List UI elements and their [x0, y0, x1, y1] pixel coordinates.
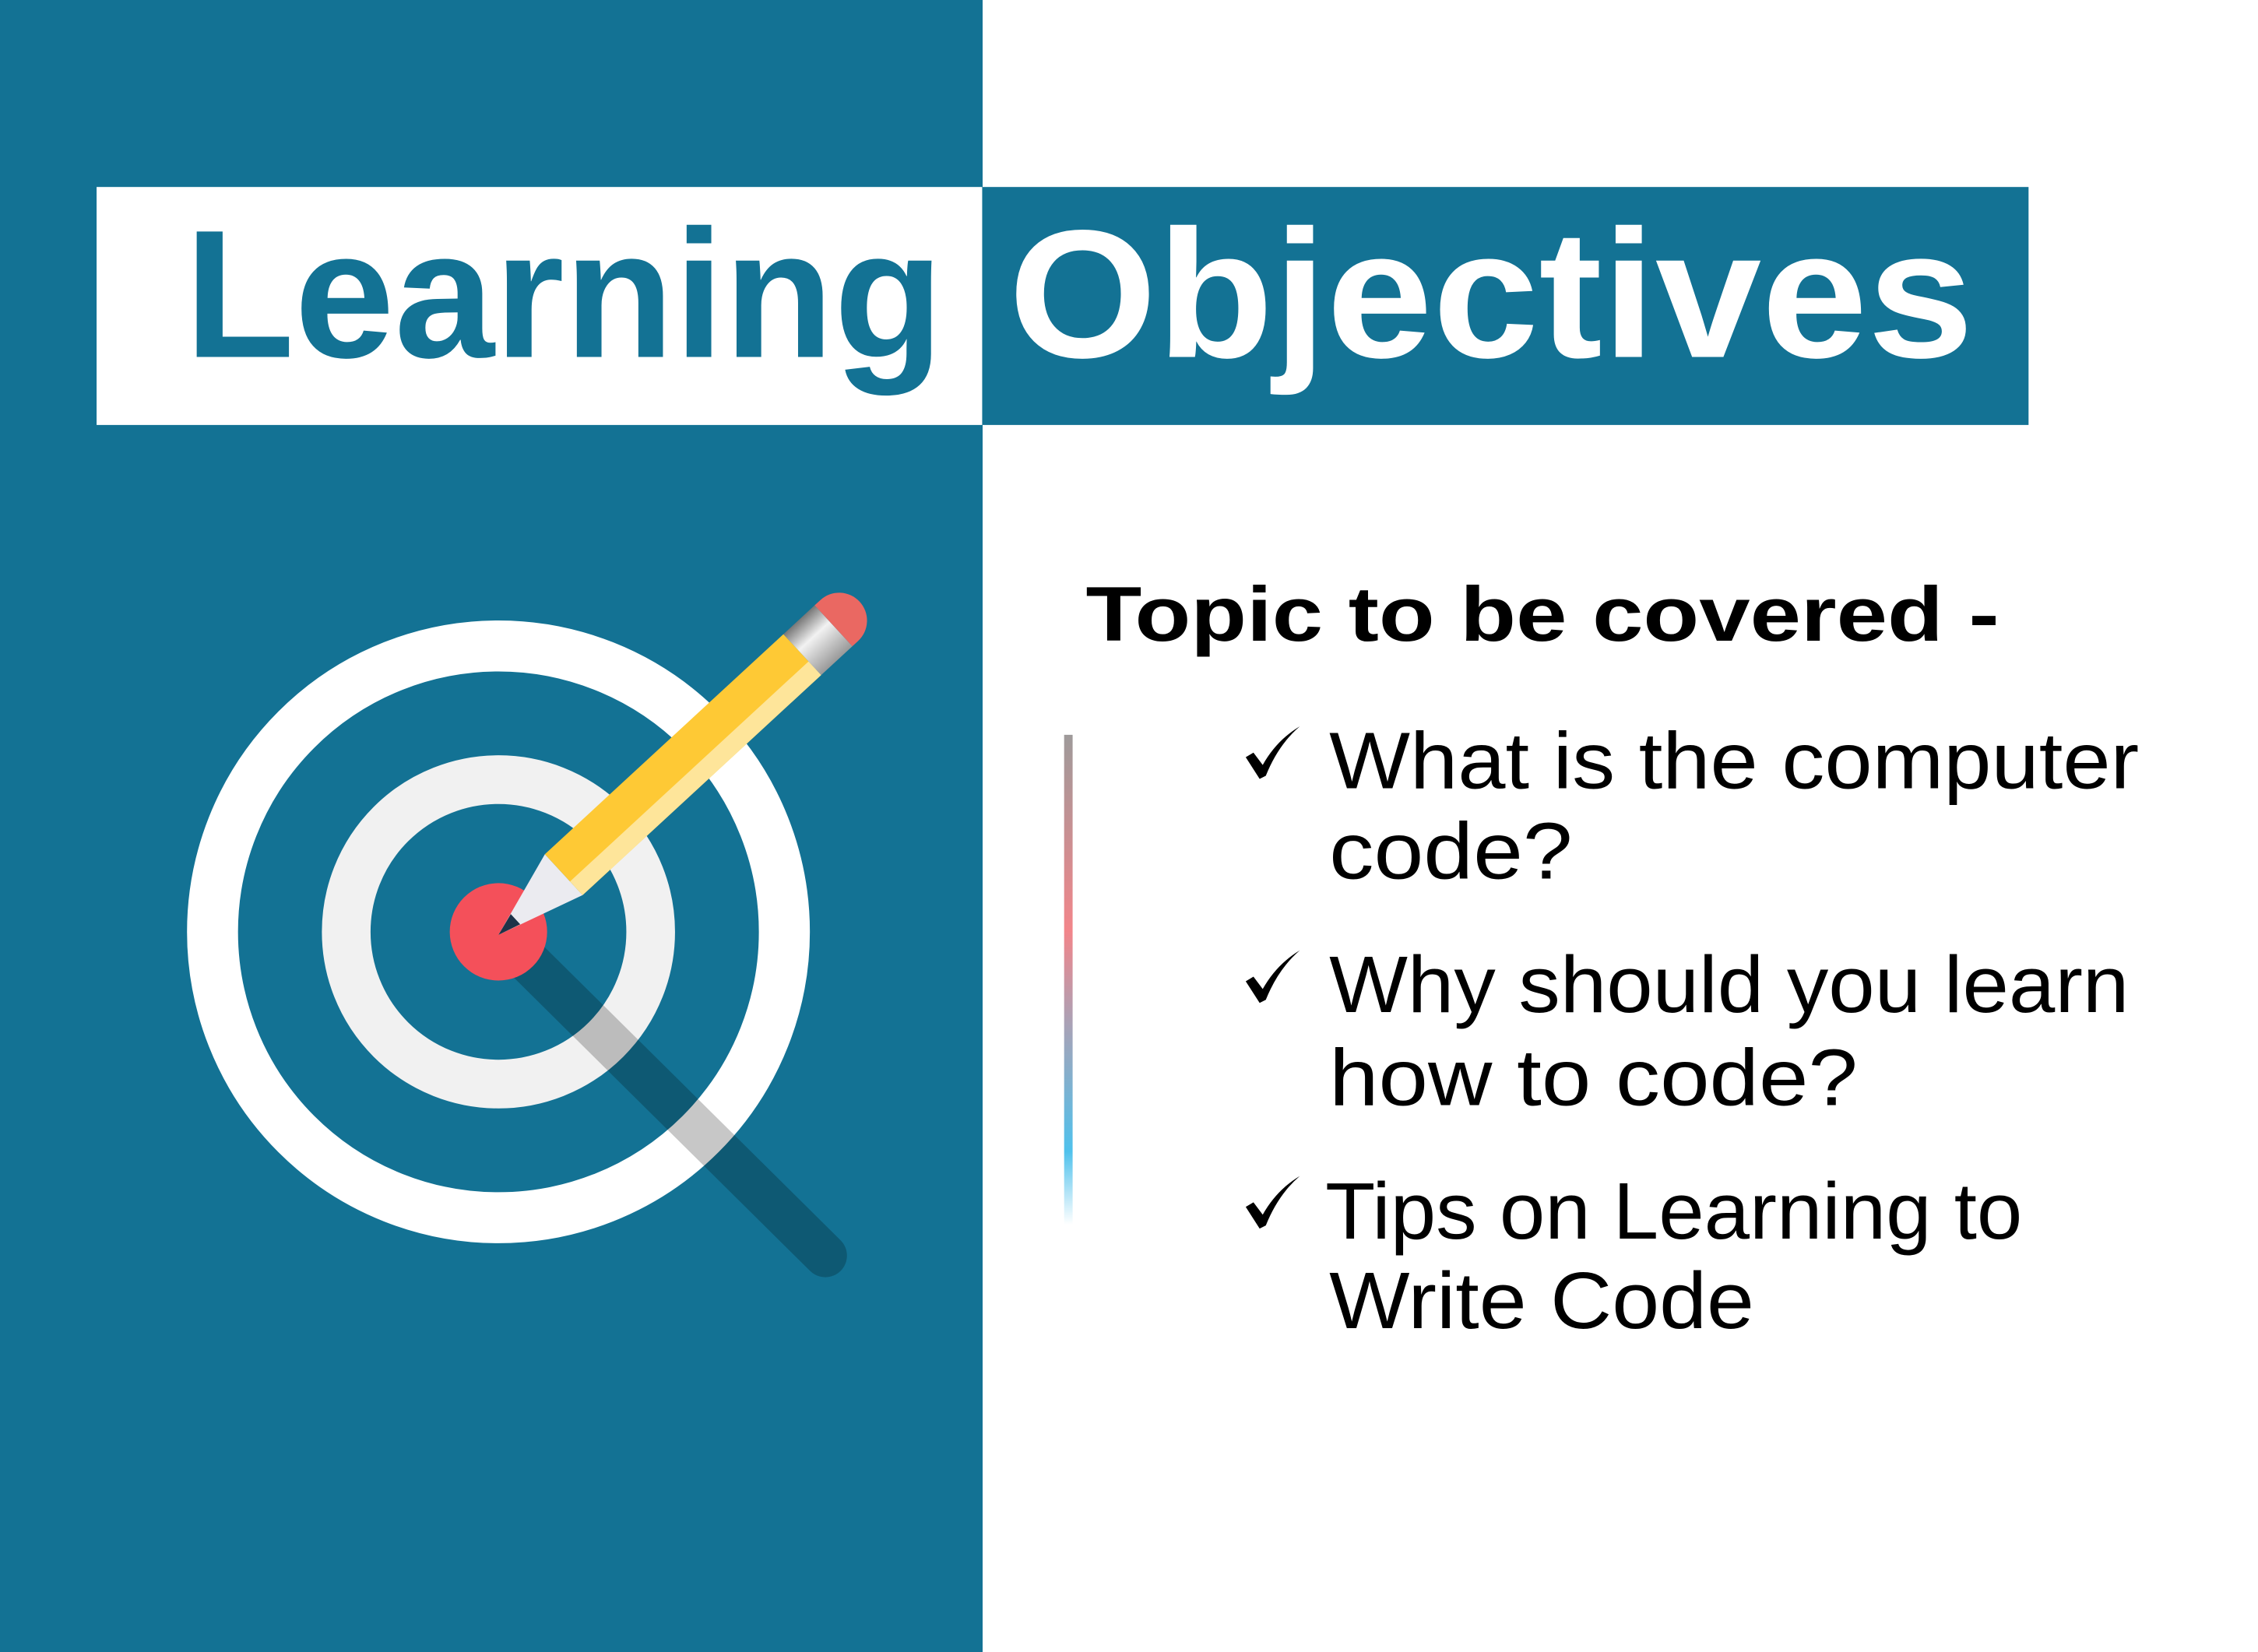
- icon: target with pencil: [213, 582, 878, 1256]
- left blue panel: [0, 0, 983, 1652]
- icon: check: [1246, 951, 1300, 1003]
- list: topics: [1246, 715, 2139, 1345]
- title band: [97, 187, 2028, 425]
- item 3: Tips on Learning to: [1325, 1166, 2022, 1256]
- gradient divider line: [1064, 735, 1073, 1225]
- item 2: Why should you learn: [1329, 940, 2129, 1029]
- item 2: how to code?: [1329, 1032, 1858, 1122]
- item 3: [1246, 1166, 2022, 1345]
- heading: topic: Topic to be covered -: [1085, 571, 1999, 658]
- item 1: code?: [1329, 806, 1573, 895]
- icon: check: [1246, 726, 1300, 779]
- title: Learning: Learning: [185, 192, 944, 396]
- title: Objectives: Objectives: [1008, 192, 1974, 396]
- item 1: [1246, 715, 2139, 895]
- item 3: Write Code: [1329, 1256, 1754, 1345]
- icon: check: [1246, 1176, 1300, 1228]
- item 2: [1246, 940, 2129, 1122]
- item 1: What is the computer: [1329, 715, 2139, 805]
